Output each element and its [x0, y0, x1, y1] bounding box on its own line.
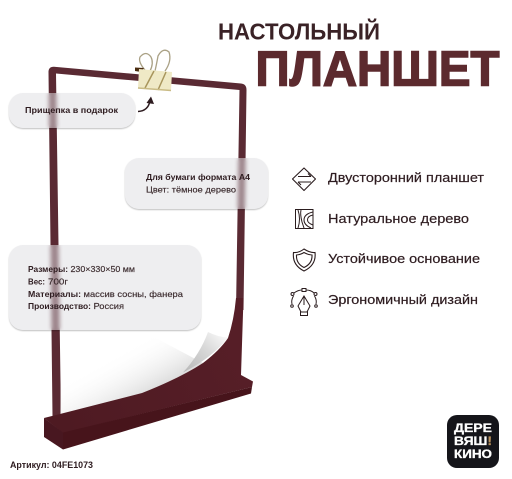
callout: specifications [9, 245, 201, 330]
callout: clip gift: Прищепка в подарок [25, 105, 119, 115]
feature: ergonomic design: Эргономичный дизайн [328, 292, 478, 307]
paper shadow above the base [60, 335, 203, 415]
feature: double sided [292, 168, 484, 190]
base: front face [63, 387, 252, 450]
clip shadow [135, 68, 144, 72]
callout: specifications: Размеры: [28, 264, 68, 274]
title line 2: ПЛАНШЕТ [256, 42, 500, 96]
callout: specifications: 700г [48, 276, 68, 286]
icon: wood grain [296, 210, 313, 228]
callout: specifications: массив сосны, фанера [84, 289, 183, 299]
frame: left rail, top rail, right rail [48, 67, 246, 416]
feature: double sided: Двусторонний планшет [328, 170, 484, 185]
base: curved wall and top surface [44, 298, 253, 433]
feature: ergonomic design [291, 288, 478, 316]
icon: shield [293, 249, 315, 271]
callout: specifications: Россия [94, 301, 124, 311]
callout: specifications: Материалы: [28, 289, 81, 299]
callout: paper format and colour [125, 158, 268, 209]
callout: paper format and colour: Для бумаги формата А4 [146, 172, 250, 182]
clip body [138, 69, 172, 90]
icon: double-sided arrows [292, 168, 316, 190]
callout: specifications: Производство: [28, 301, 91, 311]
feature: natural wood [296, 210, 469, 228]
feature: stable base: Устойчивое основание [328, 251, 480, 266]
page curl [183, 332, 228, 372]
callout: specifications: 230×330×50 мм [70, 264, 135, 274]
callout: specifications: Вес: [28, 276, 45, 286]
callout: paper format and colour: Цвет: тёмное дерево [146, 184, 236, 194]
callout: clip gift [9, 93, 135, 128]
feature: natural wood: Натуральное дерево [328, 211, 469, 226]
title line 1: НАСТОЛЬНЫЙ [218, 18, 380, 44]
article number: Артикул: 04FE1073 [10, 460, 93, 470]
clip handles [140, 50, 170, 71]
logo [447, 415, 499, 468]
logo: ДЕРЕ [454, 423, 492, 435]
logo: КИНО [454, 449, 492, 461]
feature: stable base [293, 249, 480, 271]
icon: pen tool [291, 288, 317, 316]
base: left end face [44, 418, 63, 450]
logo: ВЯШ ! [454, 436, 492, 448]
